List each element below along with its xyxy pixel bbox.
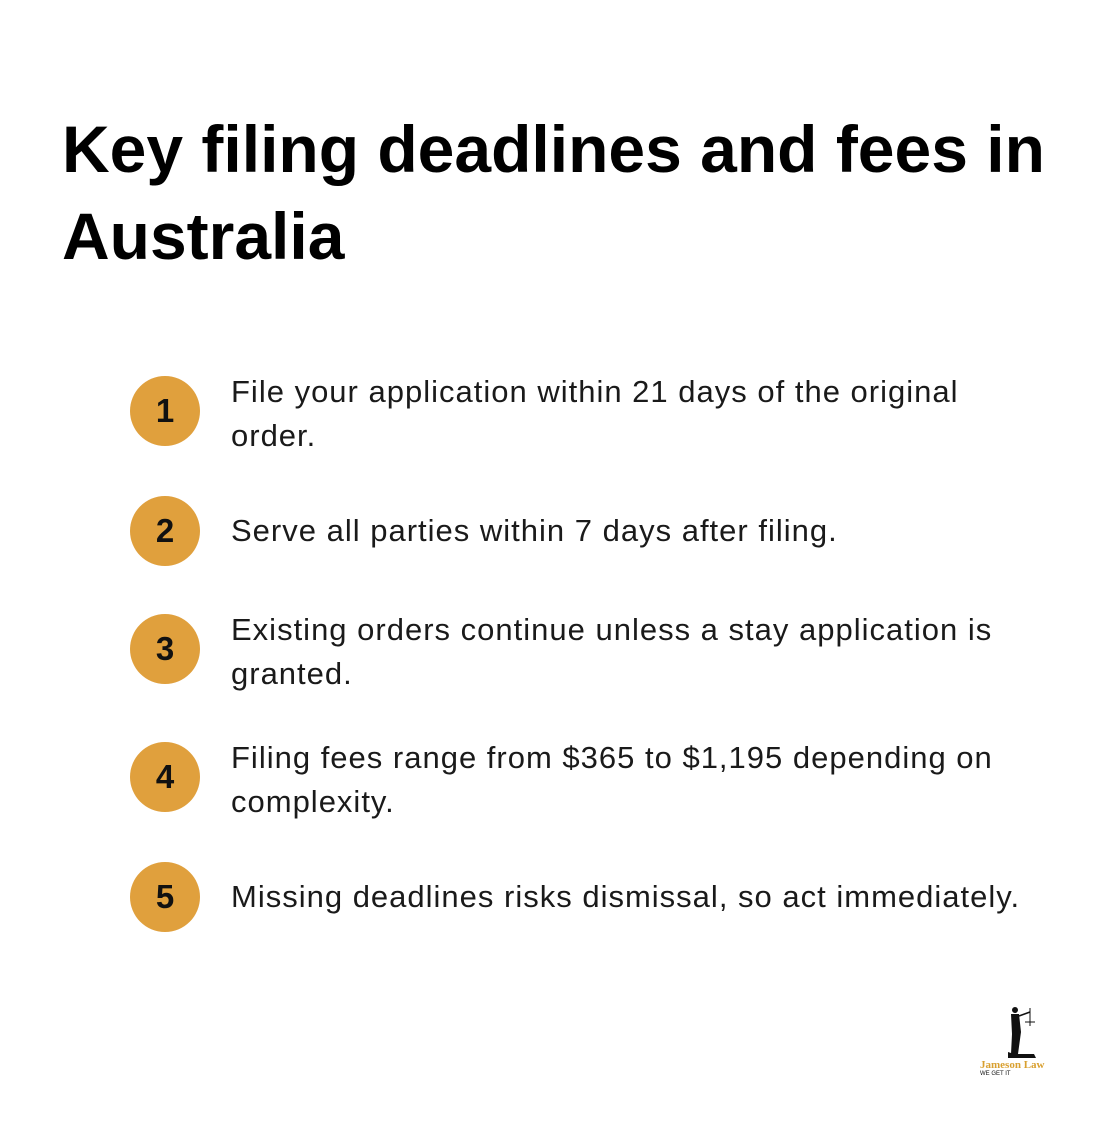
icon: justice figure [1008, 1007, 1036, 1058]
item 5 [130, 862, 1020, 932]
number circle 1 [130, 376, 200, 446]
number circle 3 [130, 614, 200, 684]
number circle 5 [130, 862, 200, 932]
number circle 4 [130, 742, 200, 812]
number circle 3: 3 [156, 630, 174, 667]
item 2 [130, 496, 838, 566]
text 4: Filing fees range from $365 to $1,195 depending on complexity. [231, 740, 993, 819]
text 1: File your application within 21 days of the original order. [231, 374, 958, 453]
logo: WE GET IT [980, 1071, 1011, 1077]
number circle 4: 4 [156, 758, 174, 795]
text 2: Serve all parties within 7 days after filing. [231, 513, 838, 548]
logo [980, 1007, 1044, 1077]
item 1 [130, 374, 958, 453]
number circle 2 [130, 496, 200, 566]
item 4 [130, 740, 993, 819]
item 3 [130, 612, 992, 691]
number circle 5: 5 [156, 878, 174, 915]
title: Key filing deadlines and fees in Australia [62, 112, 1045, 273]
text 5: Missing deadlines risks dismissal, so act immediately. [231, 879, 1020, 914]
number circle 1: 1 [156, 392, 174, 429]
number circle 2: 2 [156, 512, 174, 549]
logo text: Jameson Law [980, 1059, 1044, 1071]
text 3: Existing orders continue unless a stay application is granted. [231, 612, 992, 691]
